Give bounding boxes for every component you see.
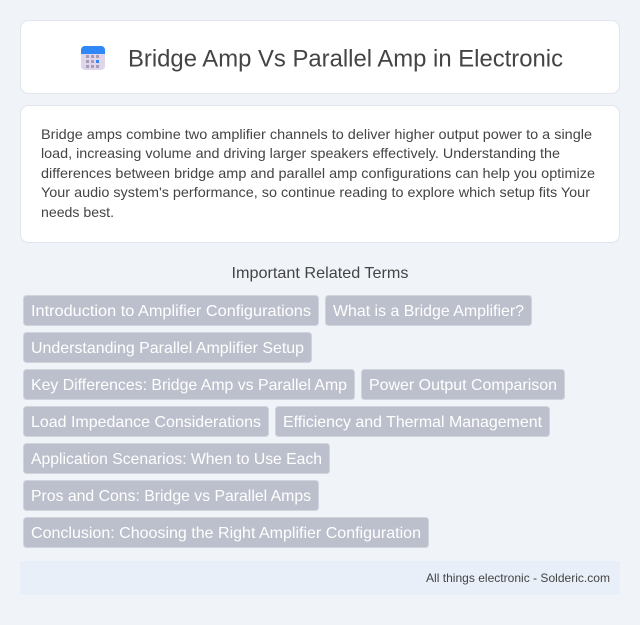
tag: Application Scenarios — [24, 444, 330, 474]
title: Bridge Amp Vs Parallel Amp in Electronic — [128, 46, 563, 72]
tag: Understanding Parallel: Understanding Parallel Amplifier Setup — [31, 340, 304, 357]
term tags — [24, 296, 564, 548]
intro text panel: Bridge amps combine two amplifier channels to deliver higher output power to a single — [41, 126, 592, 142]
tag: Application Scenarios: Application Scenarios: When to Use Each — [31, 451, 322, 468]
tag: Key Differences: Key Differences: Bridge Amp vs Parallel Amp — [31, 377, 347, 394]
intro text panel: load, increasing volume and driving larger speakers effectively. Understanding the — [41, 145, 560, 161]
tag: Load Impedance — [24, 406, 268, 436]
tag: Power Output — [362, 370, 564, 400]
tag: Load Impedance: Load Impedance Considerations — [31, 414, 261, 431]
tag: Introduction: Introduction to Amplifier Configurations — [31, 303, 311, 320]
tag: Pros and Cons — [24, 480, 318, 510]
tag: Conclusion — [24, 518, 428, 548]
intro text panel: needs best. — [41, 204, 114, 220]
tag: Efficiency: Efficiency and Thermal Management — [283, 414, 543, 431]
intro text panel: Your audio system's performance, so continue reading to explore which setup fits Your — [41, 184, 590, 200]
tag: Pros and Cons: Pros and Cons: Bridge vs Parallel Amps — [31, 488, 311, 505]
tag: Key Differences — [24, 370, 354, 400]
icon: calendar — [81, 46, 105, 70]
footer — [20, 561, 620, 595]
header panel — [20, 20, 620, 94]
intro text panel — [20, 106, 620, 242]
tag: Understanding Parallel — [24, 332, 312, 362]
tag: Conclusion: Conclusion: Choosing the Right Amplifier Configuration — [31, 525, 421, 542]
tag: Efficiency — [276, 406, 550, 436]
tag: Introduction — [24, 296, 318, 326]
footer: All things electronic - Solderic.com — [426, 571, 610, 585]
tag: Power Output: Power Output Comparison — [369, 377, 557, 394]
tag: What is a Bridge Amplifier: What is a Bridge Amplifier? — [333, 303, 524, 320]
tag: What is a Bridge Amplifier — [326, 296, 532, 326]
related terms heading: Important Related Terms — [232, 265, 408, 282]
intro text panel: differences between bridge amp and parallel amp configurations can help you optimize — [41, 165, 595, 181]
